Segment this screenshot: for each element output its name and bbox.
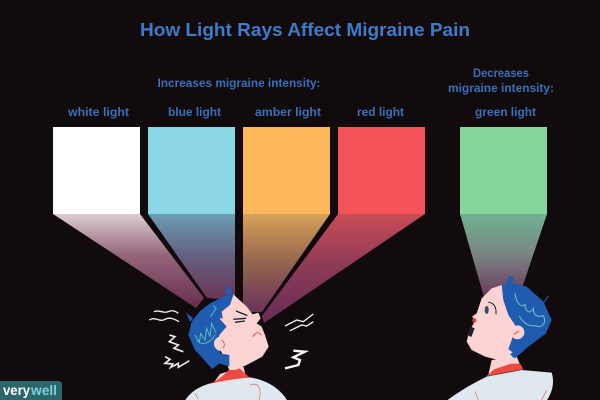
heading: increases migraine intensity: Increases migraine intensity: (158, 76, 320, 90)
beam: green light (460, 214, 547, 297)
beam: red light (262, 214, 425, 323)
swatch: red light (338, 127, 425, 214)
beam: blue light (148, 214, 235, 300)
logo: verywell: very (3, 383, 30, 398)
heading: decreases migraine intensity: migraine intensity: (448, 81, 554, 95)
swatch: white light (53, 127, 140, 214)
label: amber light: amber light (255, 105, 321, 119)
beam: white light (53, 214, 204, 308)
swatch: amber light (243, 127, 330, 214)
heading: decreases migraine intensity: Decreases (473, 66, 529, 80)
swatch: blue light (148, 127, 235, 214)
figure: boy with relief (447, 276, 553, 400)
label: white light: white light (67, 105, 129, 119)
logo: verywell: well (30, 383, 57, 398)
logo: verywell (0, 381, 62, 400)
label: green light: green light (475, 105, 536, 119)
swatch: green light (460, 127, 547, 214)
label: blue light: blue light (168, 105, 221, 119)
title: How Light Rays Affect Migraine Pain (140, 20, 470, 40)
figure: boy in pain (149, 286, 313, 400)
label: red light: red light (357, 105, 404, 119)
beam: amber light (243, 214, 330, 312)
heading: decreases migraine intensity (448, 66, 554, 95)
